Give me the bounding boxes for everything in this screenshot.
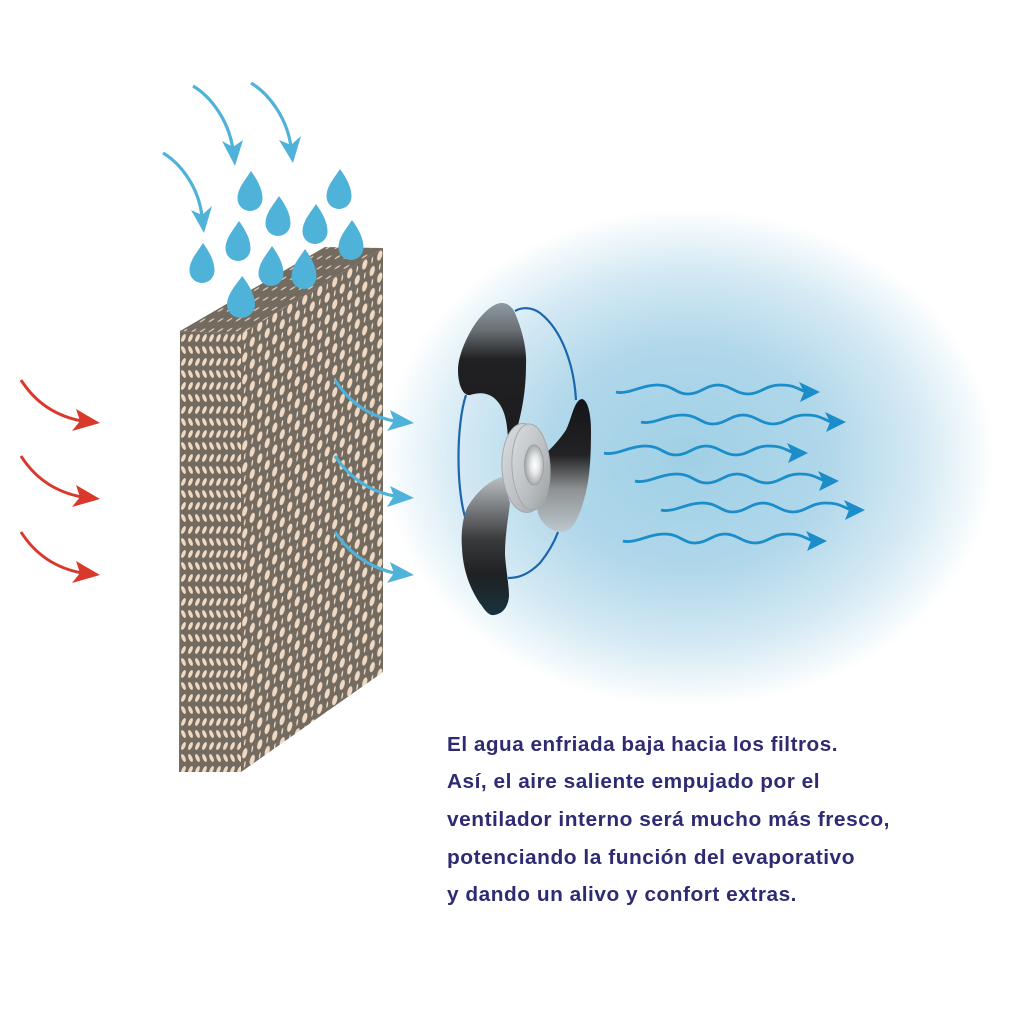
hot air arrows bbox=[21, 380, 100, 583]
description text: y dando un alivo y confort extras. bbox=[447, 884, 797, 906]
description text: Así, el aire saliente empujado por el bbox=[447, 771, 820, 793]
cooled air arrows through the pad bbox=[335, 380, 414, 583]
fan blade right bbox=[537, 399, 591, 532]
fan blade upper bbox=[458, 303, 526, 437]
fan blade lower bbox=[462, 477, 510, 615]
water drops bbox=[190, 169, 364, 318]
pad front face bbox=[179, 331, 241, 772]
description text: El agua enfriada baja hacia los filtros. bbox=[447, 734, 838, 756]
description text: ventilador interno será mucho más fresco, bbox=[447, 809, 890, 831]
fan hub cap bbox=[524, 445, 544, 485]
wavy outflow arrows bbox=[604, 382, 865, 551]
fan hub bbox=[500, 422, 550, 514]
cool air glow bbox=[383, 209, 995, 707]
fan guard ring bbox=[458, 308, 576, 578]
falling water arrows bbox=[163, 83, 301, 233]
pad top face bbox=[180, 247, 383, 334]
cooling pad block bbox=[179, 247, 383, 772]
description text bbox=[447, 734, 890, 906]
description text: potenciando la función del evaporativo bbox=[447, 847, 855, 869]
pad side face bbox=[241, 248, 383, 772]
fan bbox=[458, 303, 591, 615]
